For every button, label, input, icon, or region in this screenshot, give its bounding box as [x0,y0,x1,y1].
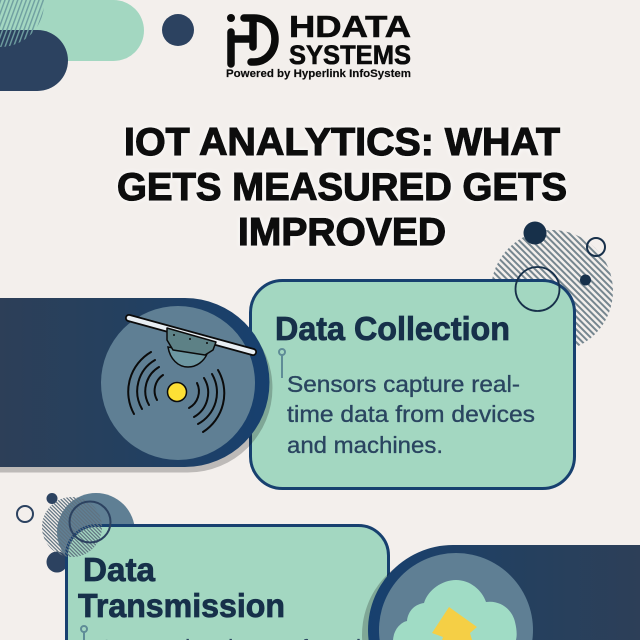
body text: time data from devices [287,401,535,427]
sensor bracket [167,328,216,355]
signal waves [128,352,224,432]
title: IOT ANALYTICS: WHAT [124,121,560,164]
body text [287,371,535,458]
logo [226,9,411,80]
body text: Sensors capture real- [287,371,520,397]
band: data transmission [362,545,640,640]
logo wordmark: Powered by Hyperlink InfoSystem [226,68,411,80]
icon: cloud upload [379,553,533,640]
band: data collection [0,298,272,472]
hatched circle decoration, right [491,230,613,352]
card: data transmission [66,526,388,640]
decorations behind card two [17,493,135,572]
hatch and ring over card two corner [42,497,110,557]
title: IMPROVED [238,211,446,254]
pin marker [279,349,285,378]
icon: sensor [101,306,255,460]
pin marker [81,626,87,640]
logo wordmark [226,9,411,80]
logo wordmark: HDATA [289,9,411,44]
decorative dots and rings, right [516,222,605,311]
logo wordmark: SYSTEMS [289,40,411,70]
decorative dot [162,14,194,46]
mounting bar [129,318,253,352]
heading [78,551,285,624]
body text: and machines. [287,432,443,458]
upload arrow [432,607,477,640]
heading: Data Collection [275,310,510,347]
top-left decorative blobs [0,0,144,91]
title: GETS MEASURED GETS [117,166,567,209]
heading: Transmission [78,587,285,624]
logo icon [227,14,275,64]
card: data collection [250,280,574,488]
sensor dome [168,347,207,367]
cloud [393,580,517,640]
yellow sensor dot [168,382,186,402]
heading: Data [83,551,156,588]
bracket screws [173,334,208,344]
title [117,121,567,254]
